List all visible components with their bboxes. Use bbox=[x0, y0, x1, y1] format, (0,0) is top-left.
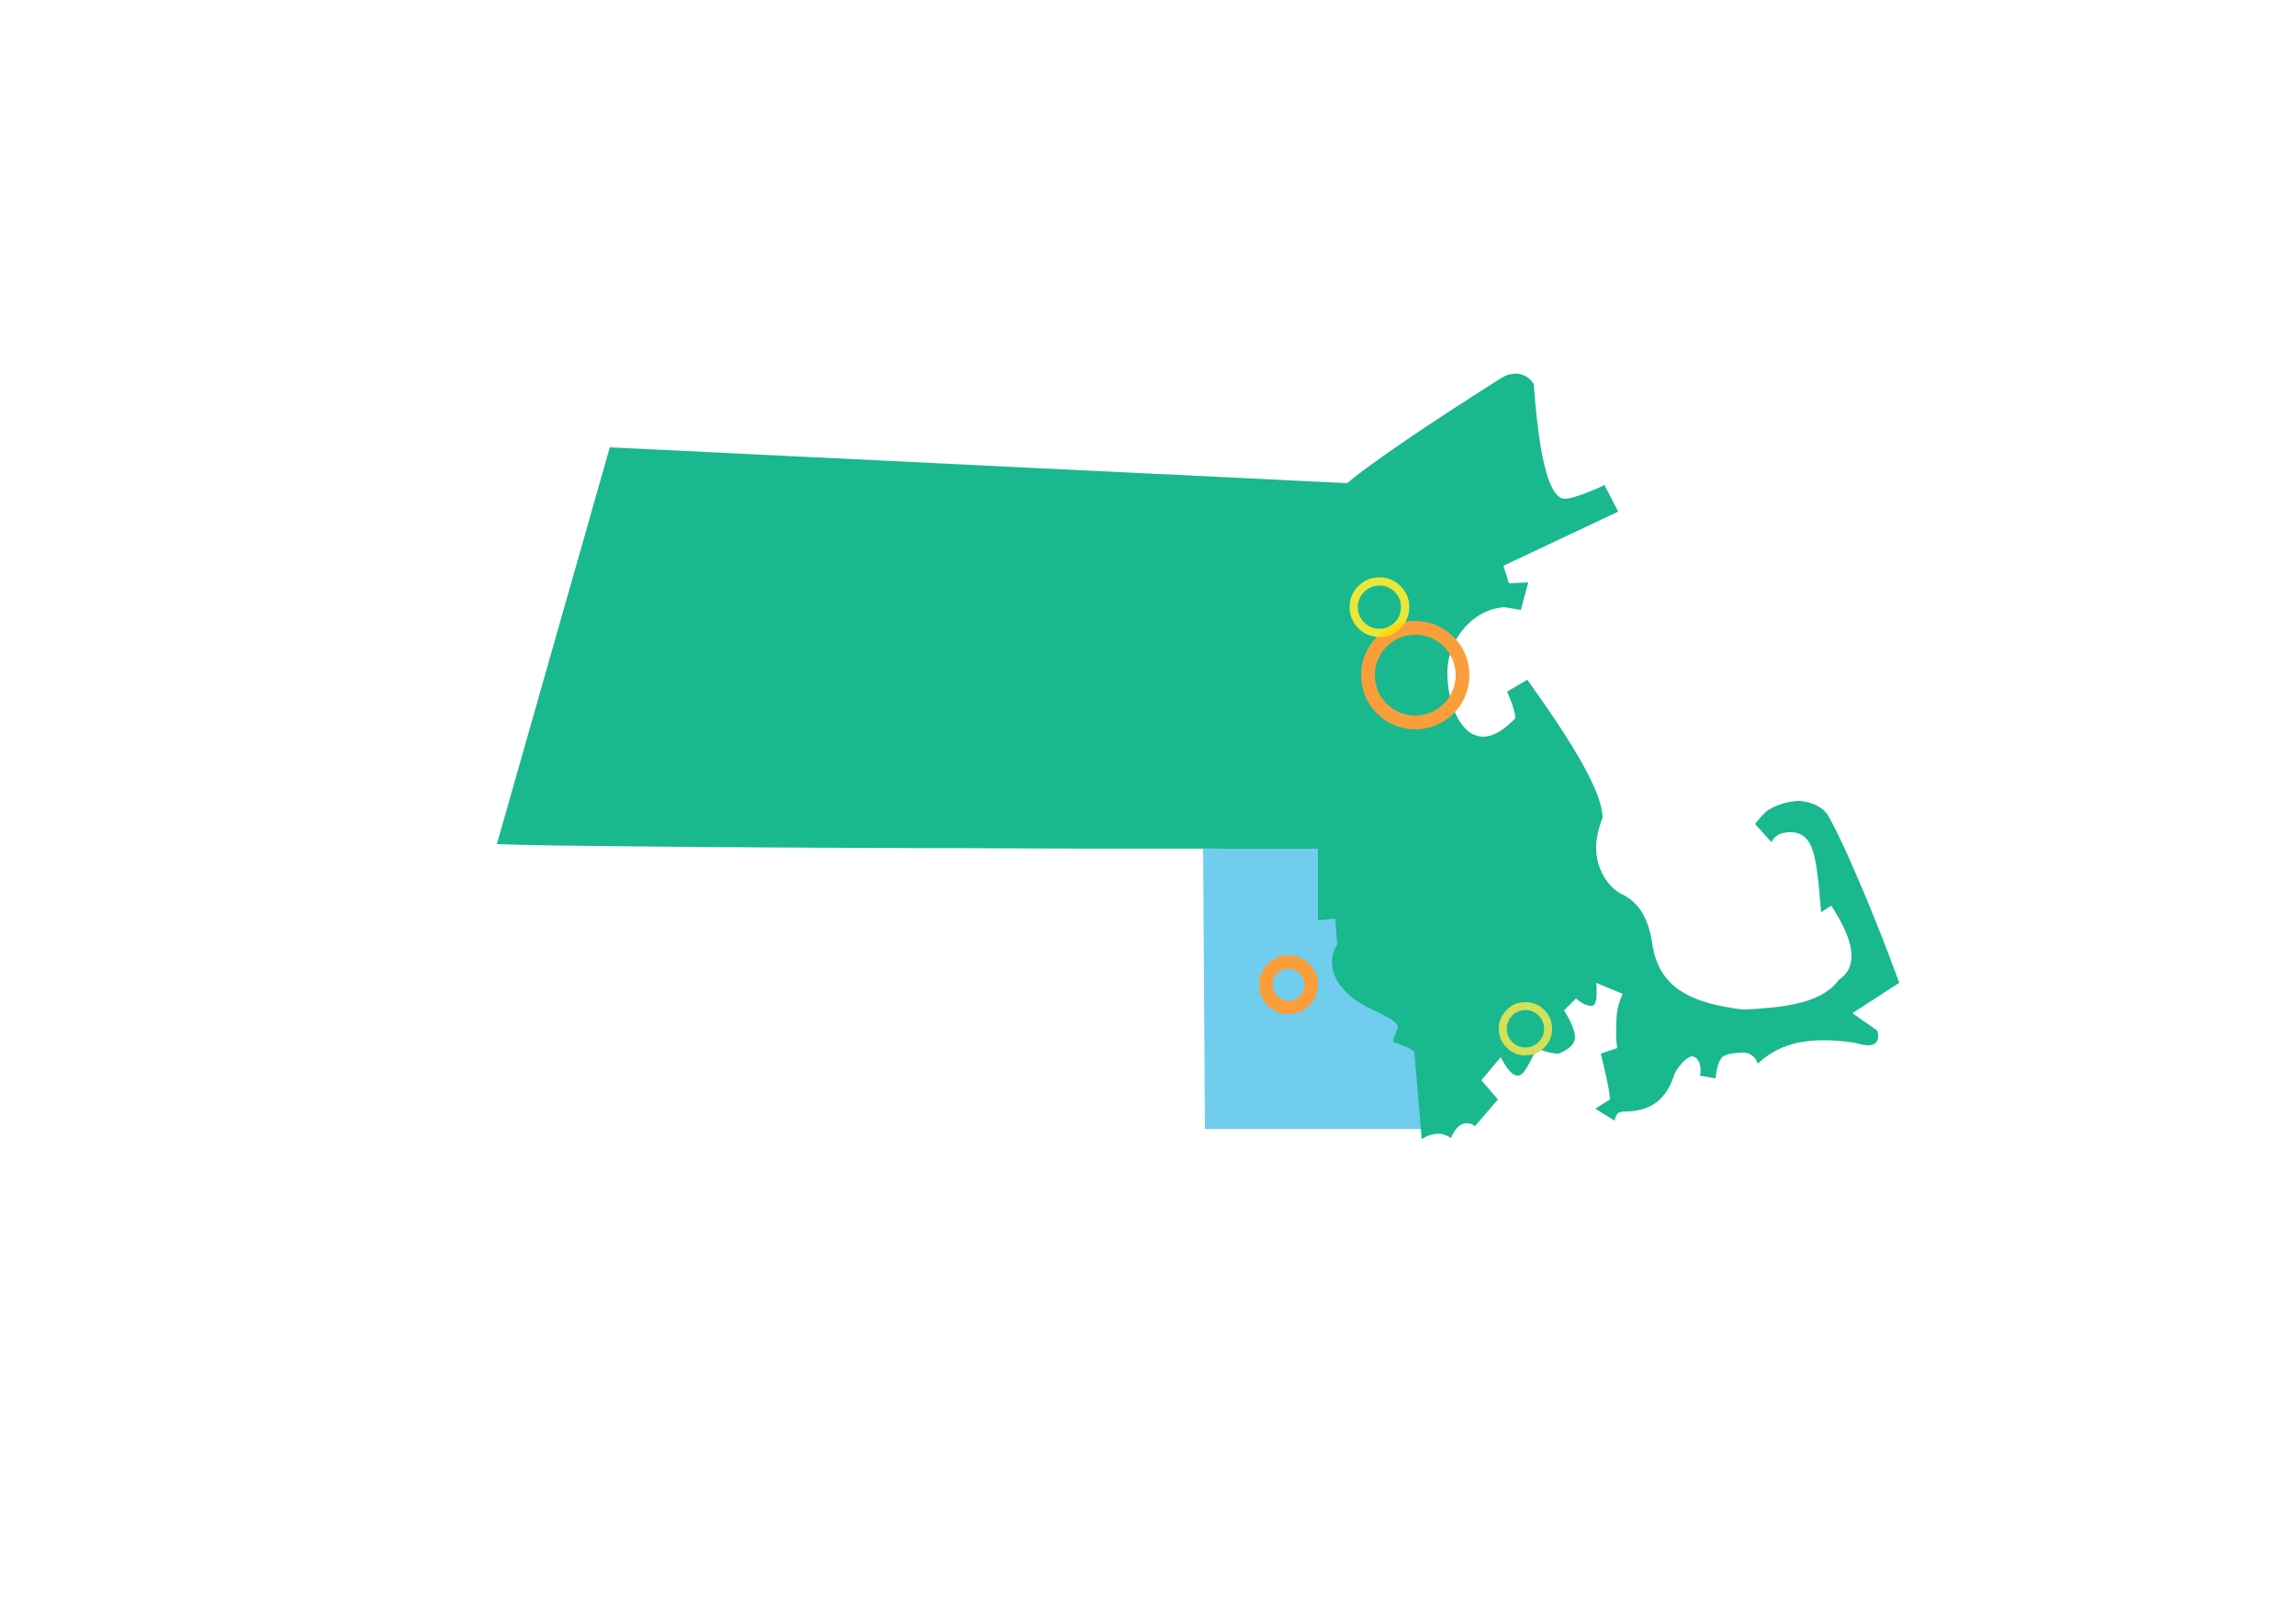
marker: yellow ring bbox=[1354, 581, 1405, 633]
region: green main state shape bbox=[497, 374, 1899, 1139]
region: blue southern area bbox=[1203, 849, 1424, 1129]
marker: orange ring small bbox=[1266, 962, 1311, 1008]
marker: orange ring large bbox=[1368, 628, 1462, 722]
marker: yellow-green ring bbox=[1503, 1006, 1548, 1052]
marker: ring overlap highlight bbox=[1377, 622, 1405, 637]
map infographic bbox=[497, 373, 1899, 1139]
